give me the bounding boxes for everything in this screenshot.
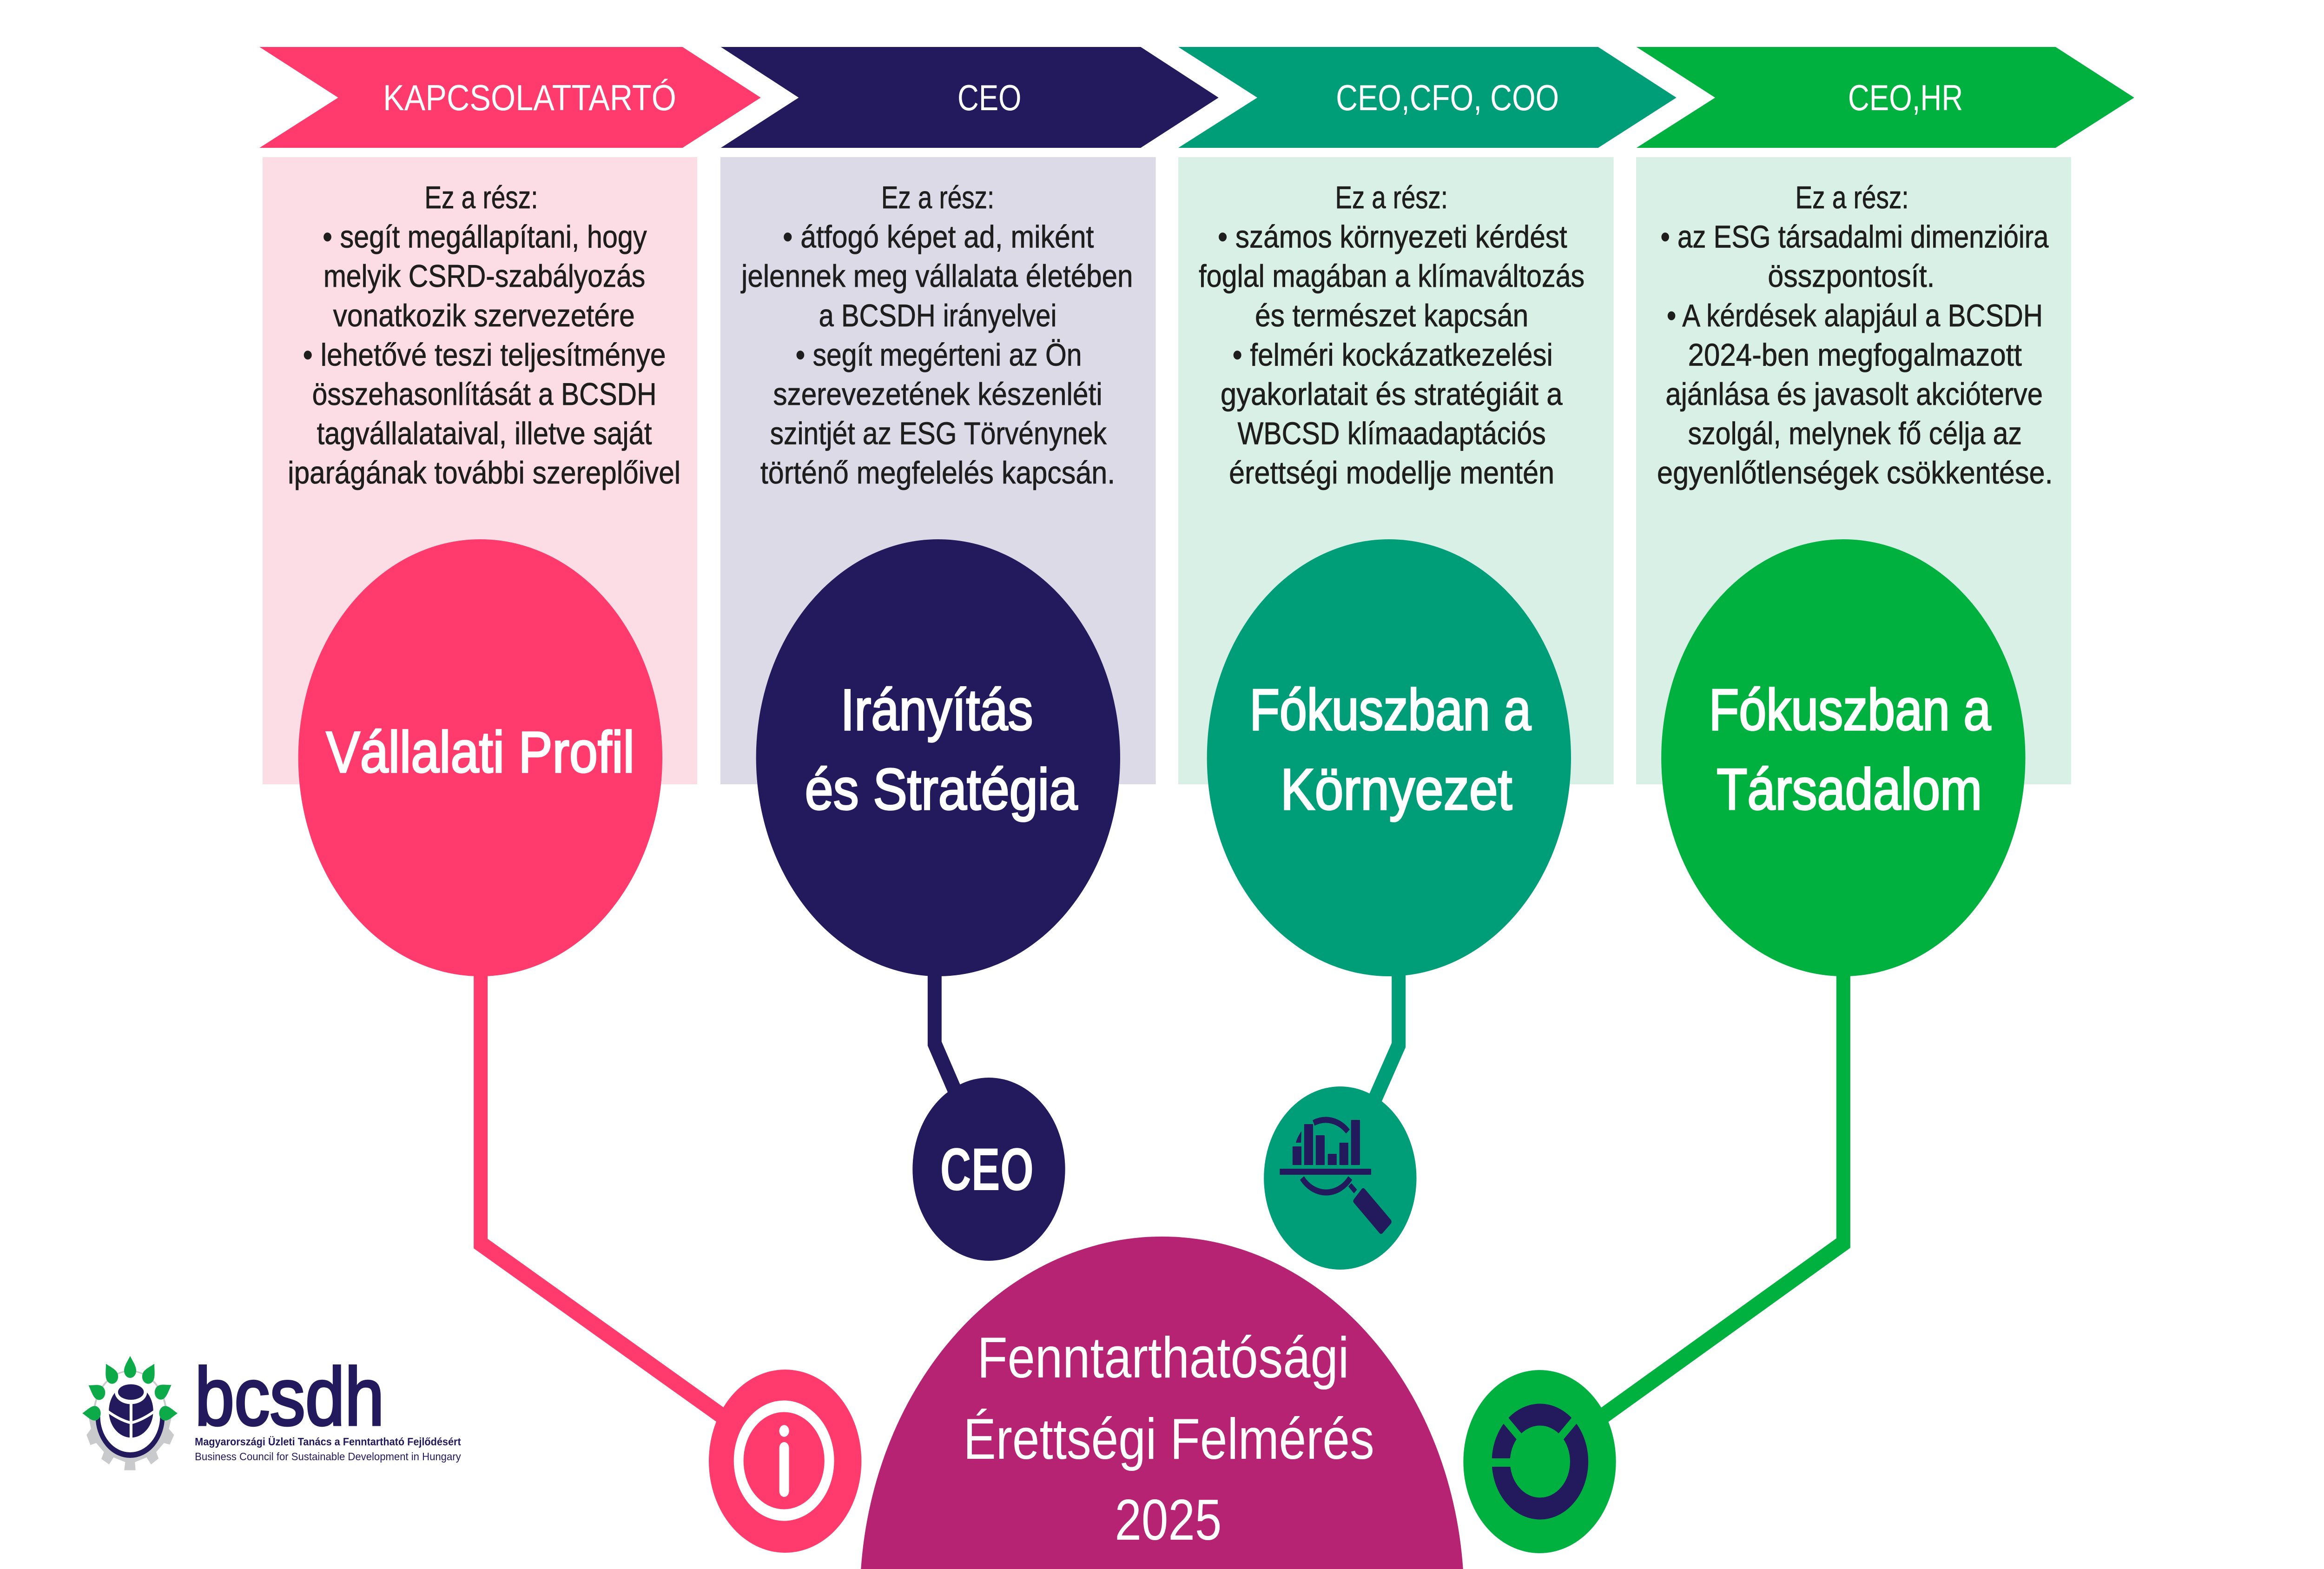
- panel: Irányítás és Stratégia description: • átfogó képet ad, miként: [783, 219, 1094, 255]
- logo: bcsdh: [82, 1351, 461, 1470]
- panel: Fókuszban a Társadalom description: [1636, 157, 2071, 784]
- panel: Fókuszban a Társadalom description: Ez a rész:: [1795, 180, 1909, 215]
- panel: Irányítás és Stratégia description: szintjét az ESG Törvénynek: [770, 416, 1107, 451]
- logo tagline English: Business Council for Sustainable Development in Hungary: [195, 1451, 461, 1463]
- circle: Fókuszban a Környezet: [1207, 539, 1571, 976]
- panel: Fókuszban a Környezet description: WBCSD klímaadaptációs: [1238, 416, 1546, 451]
- badge: CEO: CEO: [940, 1136, 1034, 1203]
- central semicircle: Fenntarthatósági Érettségi Felmérés 2025: Fenntarthatósági: [977, 1326, 1349, 1390]
- panel: Fókuszban a Környezet description: és természet kapcsán: [1255, 298, 1528, 333]
- panel: Vállalati Profil description: [263, 157, 697, 784]
- connector: Környezet to analytics icon: [1340, 953, 1399, 1178]
- panel: Vállalati Profil description: vonatkozik szervezetére: [333, 298, 635, 333]
- panel: Fókuszban a Környezet description: gyakorlatait és stratégiáit a: [1221, 377, 1563, 412]
- panel: Fókuszban a Társadalom description: összpontosít.: [1768, 258, 1934, 294]
- panel: Irányítás és Stratégia description: jelennek meg vállalata életében: [740, 258, 1133, 294]
- panel: Irányítás és Stratégia description: szerevezetének készenléti: [773, 377, 1103, 412]
- circle: Fókuszban a Társadalom: Társadalom: [1717, 757, 1982, 822]
- panel: Vállalati Profil description: tagvállalataival, illetve saját: [317, 416, 652, 451]
- panel: Irányítás és Stratégia description: történő megfelelés kapcsán.: [760, 455, 1115, 490]
- arrow header: CEO,HR: CEO,HR: [1848, 78, 1963, 118]
- connector: Társadalom to ring icon: [1539, 953, 1843, 1462]
- arrow header: KAPCSOLATTARTÓ: [259, 47, 761, 148]
- connector: Irányítás és Stratégia to CEO badge: [935, 953, 989, 1169]
- icon: information: [709, 1370, 861, 1553]
- circle: Irányítás és Stratégia: Irányítás: [840, 678, 1033, 742]
- arrow header: CEO: [721, 47, 1219, 148]
- central semicircle: Fenntarthatósági Érettségi Felmérés 2025: 2025: [1115, 1488, 1221, 1552]
- panel: Irányítás és Stratégia description: a BCSDH irányelvei: [819, 298, 1056, 333]
- panel: Fókuszban a Társadalom description: egyenlőtlenségek csökkentése.: [1657, 455, 2053, 490]
- circle: Vállalati Profil: [298, 539, 662, 976]
- badge: CEO: [912, 1078, 1065, 1261]
- panel: Fókuszban a Társadalom description: • az ESG társadalmi dimenzióira: [1661, 219, 2049, 255]
- panel: Vállalati Profil description: Ez a rész:: [424, 180, 538, 215]
- circle: Irányítás és Stratégia: [756, 539, 1120, 976]
- panel: Vállalati Profil description: • segít megállapítani, hogy: [323, 219, 647, 255]
- central semicircle: Fenntarthatósági Érettségi Felmérés 2025: [861, 1237, 1463, 1569]
- panel: Irányítás és Stratégia description: Ez a rész:: [881, 180, 994, 215]
- panel: Vállalati Profil description: • lehetővé teszi teljesítménye: [303, 338, 666, 373]
- panel: Irányítás és Stratégia description: • segít megérteni az Ön: [796, 338, 1082, 373]
- panel: Fókuszban a Társadalom description: szolgál, melynek fő célja az: [1688, 416, 2022, 451]
- panel: Irányítás és Stratégia description: [720, 157, 1156, 784]
- panel: Fókuszban a Környezet description: • számos környezeti kérdést: [1218, 219, 1567, 255]
- arrow header: KAPCSOLATTARTÓ: KAPCSOLATTARTÓ: [383, 78, 676, 118]
- arrow header: CEO,CFO, COO: CEO,CFO, COO: [1336, 78, 1559, 118]
- circle: Vállalati Profil: Vállalati Profil: [326, 720, 634, 785]
- logo wordmark: bcsdh: [195, 1351, 384, 1443]
- circle: Fókuszban a Társadalom: Fókuszban a: [1709, 678, 1991, 742]
- arrow header: CEO,CFO, COO: [1178, 47, 1677, 148]
- circle: Fókuszban a Társadalom: [1661, 539, 2026, 976]
- central semicircle: Fenntarthatósági Érettségi Felmérés 2025: Érettségi Felmérés: [964, 1407, 1374, 1471]
- panel: Fókuszban a Társadalom description: • A kérdések alapjául a BCSDH: [1667, 298, 2043, 333]
- circle: Fókuszban a Környezet: Fókuszban a: [1249, 678, 1531, 742]
- panel: Vállalati Profil description: melyik CSRD-szabályozás: [324, 258, 645, 294]
- icon: chart under magnifying glass: [1264, 1086, 1417, 1270]
- panel: Fókuszban a Környezet description: Ez a rész:: [1335, 180, 1448, 215]
- panel: Fókuszban a Társadalom description: 2024-ben megfogalmazott: [1688, 338, 2022, 373]
- panel: Vállalati Profil description: összehasonlítását a BCSDH: [312, 377, 657, 412]
- connector: Vállalati Profil to info icon: [481, 953, 785, 1461]
- logo emblem: [82, 1356, 178, 1470]
- arrow header: CEO,HR: [1637, 47, 2134, 148]
- panel: Fókuszban a Társadalom description: ajánlása és javasolt akcióterve: [1665, 377, 2043, 412]
- icon: segmented ring: [1463, 1370, 1616, 1553]
- arrow header: CEO: CEO: [957, 78, 1022, 118]
- panel: Fókuszban a Környezet description: [1178, 157, 1614, 784]
- panel: Fókuszban a Környezet description: • felméri kockázatkezelési: [1233, 338, 1553, 373]
- panel: Fókuszban a Környezet description: érettségi modellje mentén: [1229, 455, 1554, 490]
- circle: Irányítás és Stratégia: és Stratégia: [805, 757, 1077, 822]
- logo tagline Hungarian: Magyarországi Üzleti Tanács a Fenntartható Fejlődésért: [195, 1435, 461, 1448]
- circle: Fókuszban a Környezet: Környezet: [1281, 757, 1512, 822]
- panel: Vállalati Profil description: iparágának további szereplőivel: [288, 455, 680, 490]
- panel: Fókuszban a Környezet description: foglal magában a klímaváltozás: [1199, 258, 1585, 294]
